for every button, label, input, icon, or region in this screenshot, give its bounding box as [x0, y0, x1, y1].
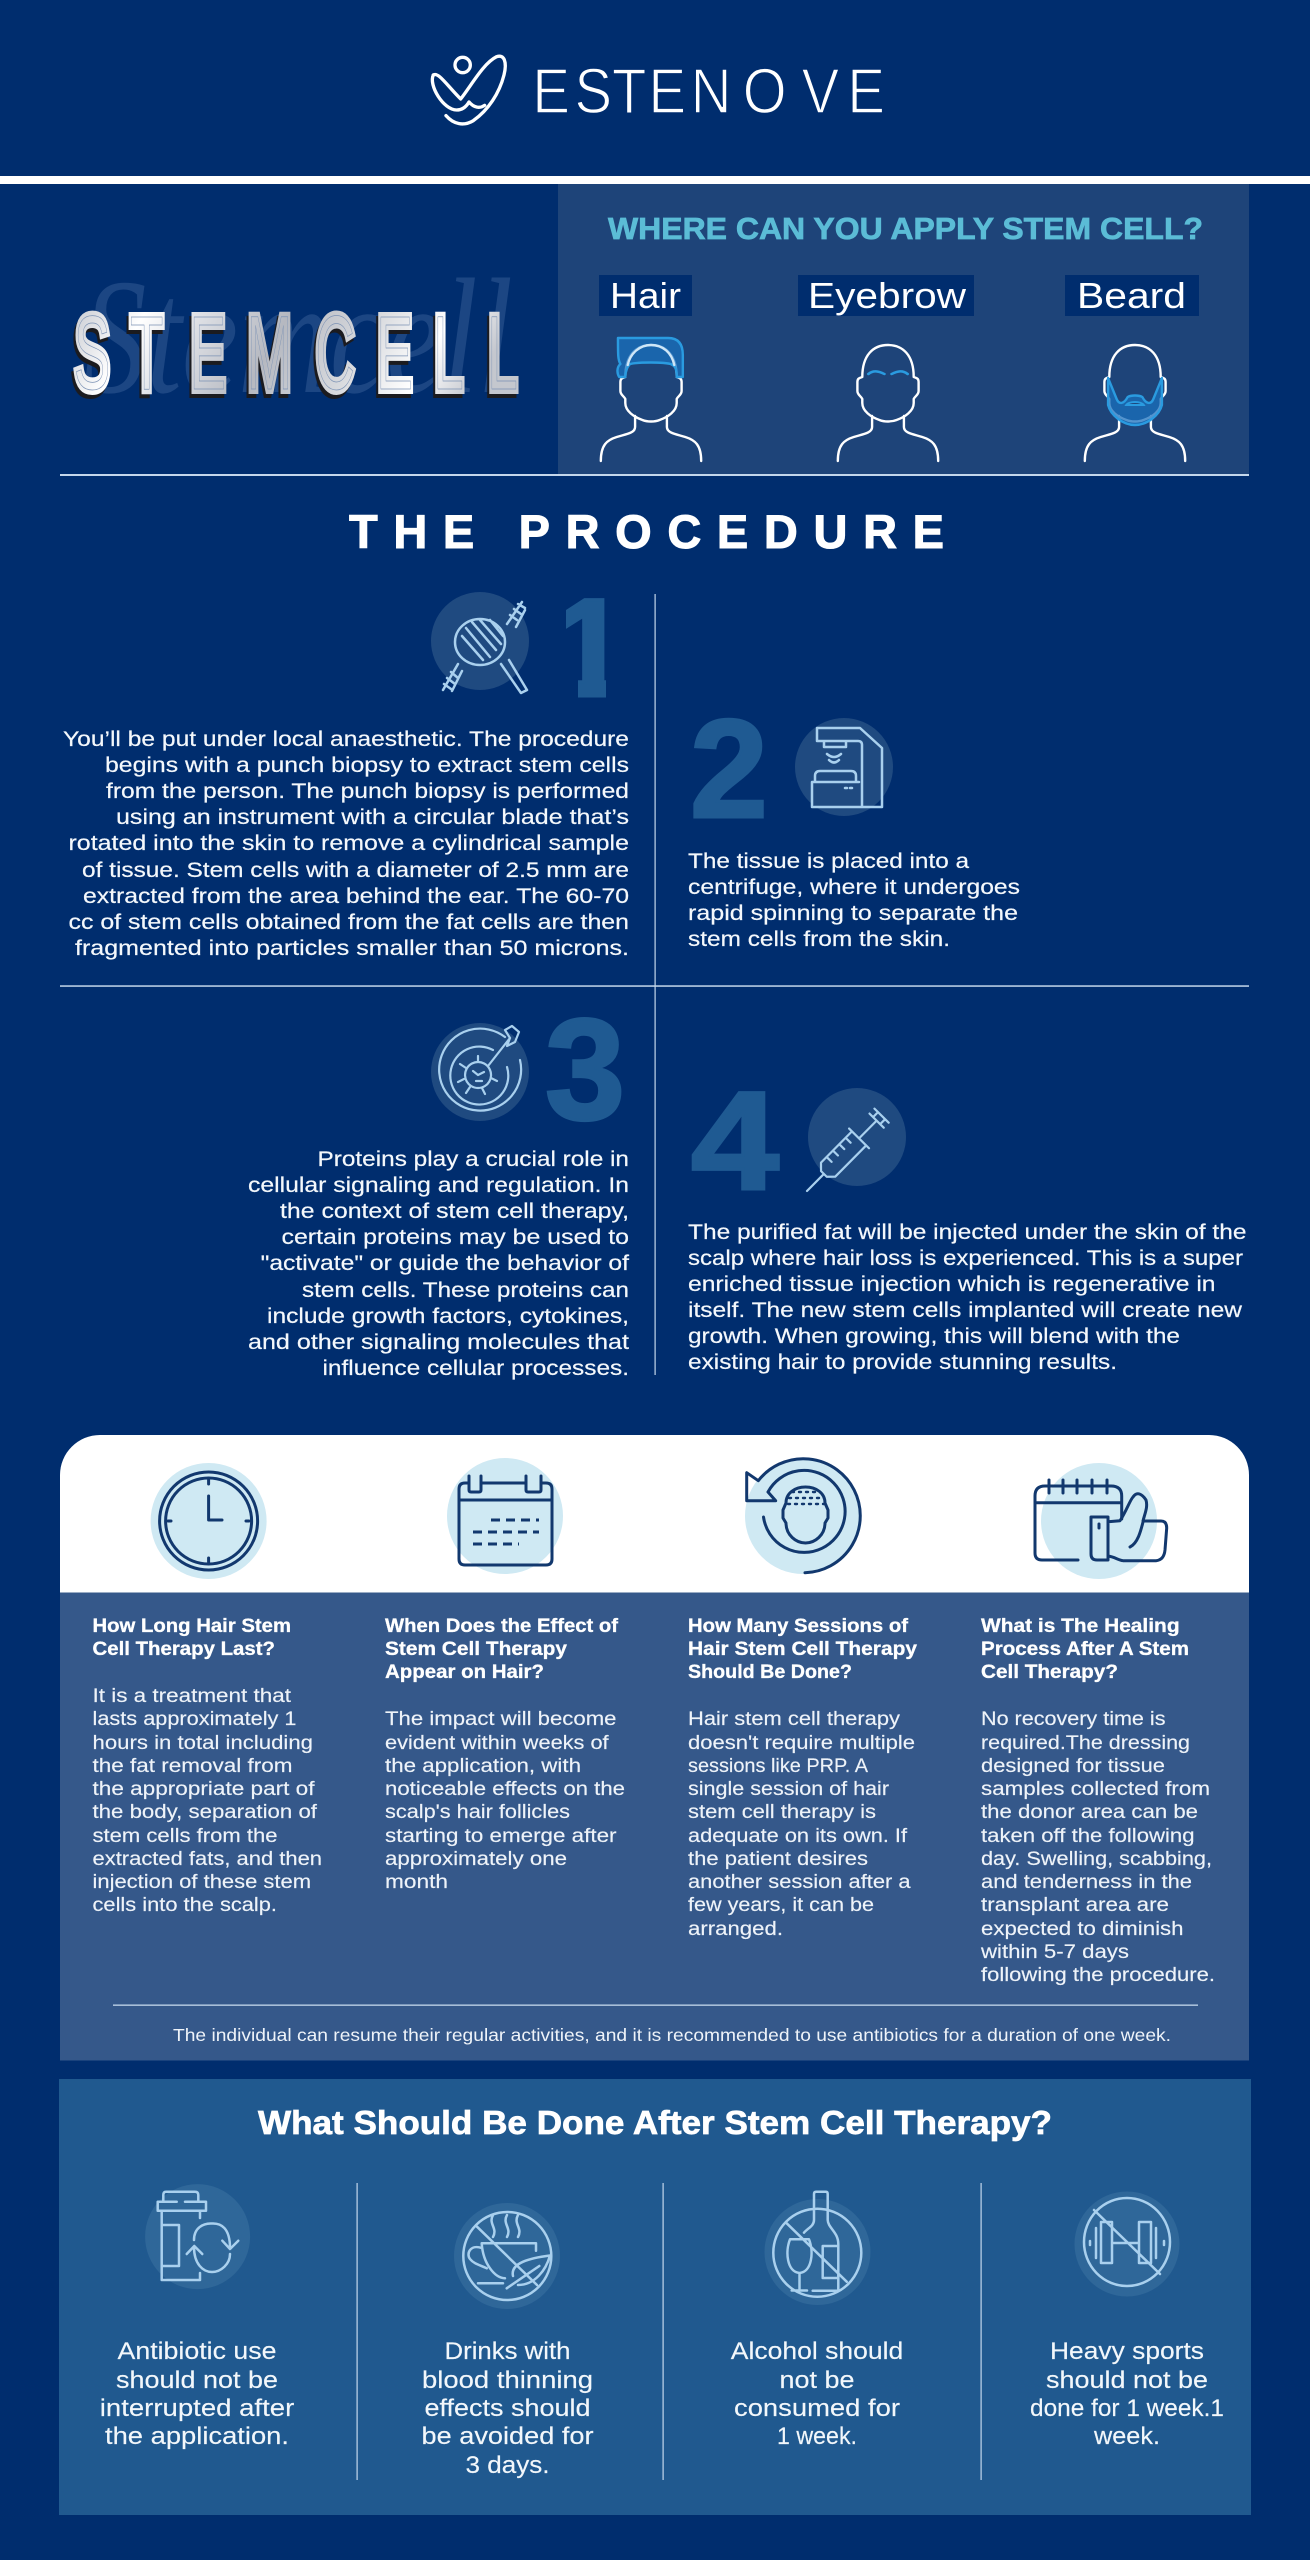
answer text: the donor area can be [981, 1802, 1198, 1823]
text block: and other signaling molecules that [248, 1330, 629, 1354]
panel: what should be done after stem cell therapy [59, 2079, 1251, 2515]
text block: The tissue is placed into a [688, 849, 969, 873]
text block: itself. The new stem cells implanted will create new [688, 1298, 1243, 1322]
icon: calendar [447, 1458, 563, 1574]
answer text: Hair stem cell therapy [688, 1709, 901, 1730]
question heading: How Long Hair Stem [92, 1616, 291, 1637]
panel: FAQ [60, 1435, 1249, 2060]
divider under header [60, 474, 1249, 476]
answer text: taken off the following [981, 1826, 1194, 1847]
icon: syringe [797, 1088, 906, 1201]
text: the application. [105, 2423, 289, 2450]
text [100, 2338, 294, 2450]
text: should not be [116, 2367, 278, 2394]
answer text: the fat removal from [92, 1756, 292, 1777]
answer text: the appropriate part of [92, 1779, 315, 1800]
answer text: designed for tissue [981, 1756, 1165, 1777]
answer text: the application, with [385, 1756, 581, 1777]
panel: where can you apply stem cell [558, 184, 1249, 476]
question heading: Stem Cell Therapy [385, 1639, 567, 1660]
brand name: ESTENOVE [532, 55, 885, 127]
number 1: 1 [551, 569, 629, 726]
answer text: single session of hair [688, 1779, 890, 1800]
text block: of tissue. Stem cells with a diameter of 2.5 mm are [82, 858, 629, 882]
icon: no blood thinning drinks [454, 2203, 560, 2309]
answer text: stem cell therapy is [688, 1802, 876, 1823]
column 3 [688, 1616, 917, 1940]
icon: magnifier with dna [431, 592, 529, 693]
answer text: required.The dressing [981, 1733, 1190, 1754]
text block [688, 1220, 1246, 1374]
answer text [980, 1709, 1215, 1986]
text block: rotated into the skin to remove a cylindrical sample [68, 831, 629, 855]
stemcell title logo [74, 245, 518, 428]
step 3 [248, 989, 629, 1380]
answer text: extracted fats, and then [92, 1849, 322, 1870]
heading: the procedure: THE PROCEDURE [349, 505, 944, 558]
text block: scalp where hair loss is experienced. This is a super [688, 1246, 1243, 1270]
text: not be [780, 2367, 854, 2394]
icon: head in cycle [745, 1458, 861, 1574]
text: Drinks with [444, 2338, 570, 2365]
answer text: scalp's hair follicles [385, 1802, 570, 1823]
text [1030, 2338, 1224, 2450]
text block: the context of stem cell therapy, [280, 1199, 629, 1223]
answer text: the body, separation of [92, 1802, 318, 1823]
block title: STEMCELL [74, 294, 518, 412]
text: week. [1093, 2423, 1160, 2450]
answer text: stem cells from the [92, 1826, 278, 1847]
text: be avoided for [422, 2423, 594, 2450]
text block [248, 1147, 629, 1380]
answer text: adequate on its own. If [688, 1826, 908, 1847]
answer text: It is a treatment that [92, 1686, 292, 1707]
icon: head with eyebrows [838, 345, 938, 461]
answer text: and tenderness in the [981, 1872, 1192, 1893]
number 3: 3 [545, 989, 625, 1150]
number 4: 4 [691, 1062, 779, 1219]
answer text: sessions like PRP. A [688, 1756, 868, 1777]
text block: Proteins play a crucial role in [318, 1147, 629, 1171]
text block: using an instrument with a circular blade that’s [116, 805, 629, 829]
answer text: month [385, 1872, 448, 1893]
text block: You’ll be put under local anaesthetic. The procedure [63, 727, 629, 751]
text block: The purified fat will be injected under the skin of the [688, 1220, 1246, 1244]
answer text: following the procedure. [981, 1965, 1215, 1986]
text: should not be [1046, 2367, 1208, 2394]
text block: enriched tissue injection which is regenerative in [688, 1272, 1216, 1296]
answer text: another session after a [688, 1872, 911, 1893]
icon: target with arrow [431, 1023, 529, 1121]
text block: extracted from the area behind the ear. The 60-70 [83, 884, 629, 908]
answer text: few years, it can be [688, 1895, 874, 1916]
icon: antibiotic bottle with cycle [145, 2184, 250, 2289]
text block [688, 849, 1020, 951]
column 2 [385, 1616, 625, 1893]
answer text: injection of these stem [92, 1872, 311, 1893]
answer text: The impact will become [385, 1709, 616, 1730]
panel heading: WHERE CAN YOU APPLY STEM CELL? [608, 211, 1203, 246]
text block: fragmented into particles smaller than 50 microns. [75, 936, 629, 960]
text: consumed for [734, 2395, 900, 2422]
header logo: Estenove [432, 55, 885, 127]
answer text: arranged. [688, 1919, 783, 1940]
icon: no heavy sports [1074, 2192, 1180, 2296]
step 4 [688, 1062, 1246, 1374]
answer text: transplant area are [981, 1895, 1169, 1916]
question heading [688, 1616, 917, 1683]
question heading [92, 1616, 291, 1660]
column 1 [92, 1616, 322, 1916]
text: 1 week. [777, 2423, 857, 2450]
answer text: cells into the scalp. [92, 1895, 277, 1916]
question heading: Hair Stem Cell Therapy [688, 1639, 917, 1660]
icon: centrifuge machine [795, 718, 893, 816]
icon: calendar with thumbs up [1035, 1463, 1167, 1579]
question heading: When Does the Effect of [385, 1616, 619, 1637]
icon: head with hair [601, 338, 701, 461]
text block: include growth factors, cytokines, [267, 1304, 629, 1328]
column 4 [980, 1616, 1215, 1986]
text: blood thinning [422, 2367, 593, 2394]
text block: existing hair to provide stunning results. [688, 1350, 1117, 1374]
text block: certain proteins may be used to [282, 1225, 629, 1249]
number 2: 2 [690, 690, 768, 847]
question heading: Appear on Hair? [385, 1662, 544, 1683]
step 2 [688, 690, 1020, 951]
question heading: What is The Healing [981, 1616, 1180, 1637]
question heading: Cell Therapy Last? [92, 1639, 275, 1660]
icon: head with beard [1085, 345, 1185, 461]
answer text: evident within weeks of [385, 1733, 609, 1754]
icon: clock [151, 1463, 267, 1579]
question heading: Should Be Done? [688, 1662, 852, 1683]
label: hair: Hair [610, 275, 681, 316]
answer text: samples collected from [981, 1779, 1210, 1800]
text block: cellular signaling and regulation. In [248, 1173, 629, 1197]
answer text [385, 1709, 625, 1893]
answer text: starting to emerge after [385, 1826, 617, 1847]
label: beard: Beard [1077, 275, 1186, 316]
text block: centrifuge, where it undergoes [688, 875, 1020, 899]
block title inline engraving: STEMCELL [74, 294, 518, 412]
question heading: Cell Therapy? [981, 1662, 1118, 1683]
answer text: lasts approximately 1 [92, 1709, 296, 1730]
answer text: noticeable effects on the [385, 1779, 625, 1800]
text block [63, 727, 629, 960]
text: 3 days. [466, 2452, 550, 2479]
section: procedure grid lines [60, 594, 1249, 1375]
answer text: day. Swelling, scabbing, [981, 1849, 1212, 1870]
answer text: approximately one [385, 1849, 567, 1870]
answer text [92, 1686, 322, 1916]
label: eyebrow: Eyebrow [808, 275, 967, 316]
text block: "activate" or guide the behavior of [261, 1251, 629, 1275]
text block: stem cells from the skin. [688, 927, 950, 951]
answer text [688, 1709, 915, 1940]
icon: no alcohol [764, 2192, 870, 2305]
answer text: the patient desires [688, 1849, 868, 1870]
text block: begins with a punch biopsy to extract stem cells [105, 753, 629, 777]
script watermark: Stemcell [83, 245, 513, 428]
text [731, 2338, 903, 2450]
text block: growth. When growing, this will blend with the [688, 1324, 1180, 1348]
question heading [385, 1616, 619, 1683]
footer note: The individual can resume their regular activities, and it is recommended to use antibiotics for a duration of one week. [173, 2025, 1171, 2045]
step 1 [63, 569, 629, 960]
answer text: within 5-7 days [980, 1942, 1129, 1963]
answer text: expected to diminish [981, 1919, 1184, 1940]
text block: rapid spinning to separate the [688, 901, 1018, 925]
text block: stem cells. These proteins can [302, 1278, 629, 1302]
white band divider [0, 176, 1310, 184]
answer text: doesn't require multiple [688, 1733, 915, 1754]
panel heading: What Should Be Done After Stem Cell Therapy? [258, 2104, 1052, 2141]
text block: cc of stem cells obtained from the fat cells are then [68, 910, 629, 934]
text: effects should [424, 2395, 590, 2422]
text [422, 2338, 594, 2479]
question heading: How Many Sessions of [688, 1616, 909, 1637]
text: Heavy sports [1050, 2338, 1204, 2365]
text block: influence cellular processes. [322, 1356, 629, 1380]
text: Antibiotic use [118, 2338, 276, 2365]
text: done for 1 week.1 [1030, 2395, 1224, 2422]
answer text: hours in total including [92, 1733, 313, 1754]
question heading: Process After A Stem [981, 1639, 1189, 1660]
question heading [981, 1616, 1189, 1683]
icon: logo mark [432, 56, 505, 124]
text: Alcohol should [731, 2338, 903, 2365]
answer text: No recovery time is [981, 1709, 1166, 1730]
text block: from the person. The punch biopsy is performed [106, 779, 629, 803]
text: interrupted after [100, 2395, 294, 2422]
